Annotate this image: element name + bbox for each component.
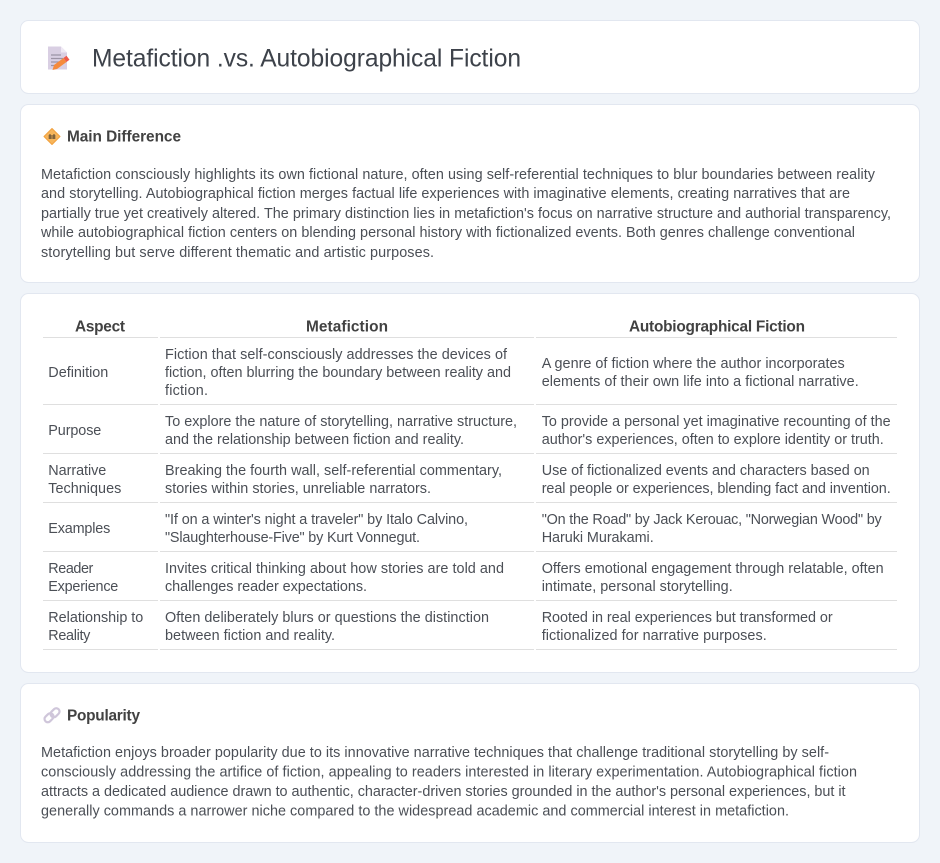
table row: definition: fiction. — [165, 383, 208, 399]
table row: reader experience — [48, 561, 884, 595]
table row: definition — [48, 347, 859, 399]
text block: main difference paragraph: while autobiographical fiction centers on blending personal history with fictionalized events. Both genres challenge conventional — [40, 225, 855, 241]
icon: document with pencil — [48, 46, 70, 70]
text block: main difference paragraph: storytelling but serve different thematic and artistic purposes. — [41, 245, 434, 261]
table row: examples — [48, 512, 882, 546]
table row: relationship to reality: Reality — [48, 628, 91, 644]
text block: popularity paragraph: attracts a dedicated audience drawn to authentic, character-driven stories grounded in the author's personal experiences, but it — [41, 784, 846, 800]
table row: purpose: author's experiences, often to explore identity or truth. — [542, 432, 884, 448]
table row: relationship to reality: Relationship to — [48, 610, 143, 626]
text block: main difference paragraph: and storytelling. Autobiographical fiction merges factual life experiences with imaginative elements, creating narratives that are — [41, 186, 850, 202]
table row: examples: Haruki Murakami. — [542, 530, 654, 546]
table row: definition: Fiction that self-consciously addresses the devices of — [165, 347, 508, 363]
title: Metafiction .vs. Autobiographical Fiction — [92, 46, 521, 73]
table row: purpose — [48, 414, 891, 448]
table row: definition: A genre of fiction where the author incorporates — [542, 356, 845, 372]
table row: definition: fiction, often blurring the boundary between reality and — [165, 365, 511, 381]
table row: purpose: To provide a personal yet imaginative recounting of the — [542, 414, 891, 430]
text block: main difference paragraph — [40, 167, 891, 261]
table row: relationship to reality — [48, 610, 833, 644]
table row: relationship to reality: Often deliberately blurs or questions the distinction — [165, 610, 489, 626]
icon: chain link — [43, 707, 61, 724]
table row: narrative techniques: real people or experiences, blending fact and invention. — [542, 481, 891, 497]
table row: examples: "Slaughterhouse-Five" by Kurt Vonnegut. — [165, 530, 420, 546]
text block: main difference paragraph: partially true yet creatively altered. The primary distinction lies in metafiction's focus on narrative structure and authorial transparency, — [41, 206, 891, 222]
panel: title card — [20, 20, 920, 94]
table row: narrative techniques: Narrative — [48, 463, 106, 479]
panel: main difference — [20, 104, 920, 282]
table row: narrative techniques — [48, 463, 891, 497]
table row: reader experience: Invites critical thinking about how stories are told and — [165, 561, 504, 577]
table row: definition: elements of their own life into a fictional narrative. — [542, 374, 859, 390]
table row: examples: Examples — [48, 521, 110, 537]
heading: popularity: Popularity — [67, 708, 140, 725]
table row: relationship to reality: fictionalized for narrative purposes. — [542, 628, 767, 644]
table header row: Aspect — [75, 319, 125, 336]
table row: relationship to reality: Rooted in real experiences but transformed or — [542, 610, 833, 626]
table row: purpose: To explore the nature of storytelling, narrative structure, — [165, 414, 517, 430]
table row: narrative techniques: Techniques — [48, 481, 121, 497]
text block: popularity paragraph: generally commands a narrower niche compared to the widespread academic and commercial interest in metafiction. — [41, 804, 789, 820]
icon: orange diamond sign — [44, 128, 60, 144]
table header row: Metafiction — [306, 319, 388, 336]
table row: reader experience: challenges reader expectations. — [165, 579, 367, 595]
table row: narrative techniques: Breaking the fourth wall, self-referential commentary, — [165, 463, 502, 479]
table row: purpose: and the relationship between fiction and reality. — [165, 432, 464, 448]
table row: reader experience: Experience — [48, 579, 118, 595]
table row: definition: Definition — [48, 365, 108, 381]
heading: main difference: Main Difference — [67, 129, 181, 146]
table row: reader experience: Offers emotional engagement through relatable, often — [542, 561, 884, 577]
table header row: Autobiographical Fiction — [629, 319, 805, 336]
text block: main difference paragraph: Metafiction consciously highlights its own fictional nature, often using self-referential techniques to blur boundaries between reality — [41, 167, 876, 183]
table row: examples: "On the Road" by Jack Kerouac, "Norwegian Wood" by — [542, 512, 882, 528]
table row: reader experience: intimate, personal storytelling. — [542, 579, 733, 595]
table header row — [75, 319, 805, 336]
table row: relationship to reality: between fiction and reality. — [165, 628, 335, 644]
table row: examples: "If on a winter's night a traveler" by Italo Calvino, — [165, 512, 468, 528]
text block: popularity paragraph: Metafiction enjoys broader popularity due to its innovative narrative techniques that challenge traditional storytelling by self- — [41, 745, 829, 761]
table row: reader experience: Reader — [48, 561, 94, 577]
table row: narrative techniques: stories within stories, unreliable narrators. — [165, 481, 431, 497]
table row: purpose: Purpose — [48, 423, 101, 439]
panel: popularity — [20, 684, 920, 842]
panel: comparison table — [20, 294, 920, 672]
text block: popularity paragraph: consciously addressing the artifice of fiction, appealing to readers interested in literary experimentation. Autobiographical fiction — [41, 765, 857, 781]
table row: narrative techniques: Use of fictionalized events and characters based on — [542, 463, 870, 479]
text block: popularity paragraph — [41, 745, 857, 820]
